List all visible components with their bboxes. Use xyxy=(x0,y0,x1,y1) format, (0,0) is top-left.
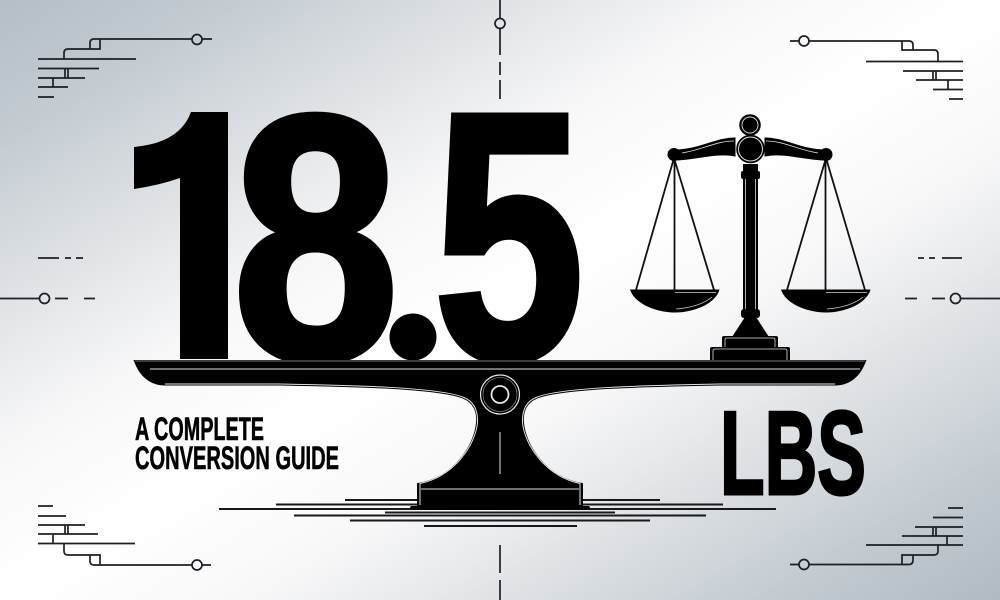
subtitle: A COMPLETE CONVERSION GUIDE: A COMPLETE xyxy=(135,411,264,447)
column xyxy=(743,164,758,314)
heading number: 18.5: . xyxy=(385,172,441,395)
left pan xyxy=(630,290,720,312)
subtitle: A COMPLETE CONVERSION GUIDE: CONVERSION GUIDE xyxy=(135,440,339,476)
decoration: top-right circuit lines xyxy=(790,36,963,99)
decoration: bottom-right circuit lines xyxy=(790,508,963,570)
decoration: top-left circuit lines xyxy=(38,34,212,97)
column flare xyxy=(732,317,769,337)
ground lines under the fulcrum xyxy=(219,500,776,526)
central ball xyxy=(737,136,764,162)
heading number: 18.5: 1 xyxy=(112,34,276,436)
scale beam xyxy=(674,138,826,160)
balance beam and pedestal xyxy=(135,361,865,510)
heading number: 18.5 xyxy=(134,112,580,360)
subtitle: A COMPLETE CONVERSION GUIDE xyxy=(135,411,339,476)
beam end knobs xyxy=(668,148,832,160)
decoration: left crosshair xyxy=(0,258,95,304)
beam and pedestal inner outline xyxy=(150,369,860,505)
pivot xyxy=(479,374,521,416)
beam top edge xyxy=(135,360,865,362)
small scale on the right xyxy=(630,115,870,362)
pedestal foot xyxy=(410,506,590,510)
beam highlight xyxy=(682,141,818,153)
upper step of the base xyxy=(722,336,778,348)
decoration: bottom-left circuit lines xyxy=(38,506,211,570)
heading number: 18.5: 5 xyxy=(433,39,585,434)
pan highlights xyxy=(675,292,867,309)
unit label: LBS: LBS xyxy=(720,387,866,520)
heading number: 18.5: 8 xyxy=(232,44,399,434)
lower collar xyxy=(741,309,760,318)
decoration: bottom centre axis xyxy=(499,545,501,600)
hanging strings xyxy=(636,158,865,290)
lower step of the base xyxy=(710,347,790,362)
decoration: top centre axis xyxy=(495,0,505,99)
right pan xyxy=(781,290,870,312)
upper collar xyxy=(741,171,760,179)
decoration: right crosshair xyxy=(905,258,1000,304)
top ball finial xyxy=(740,115,760,135)
